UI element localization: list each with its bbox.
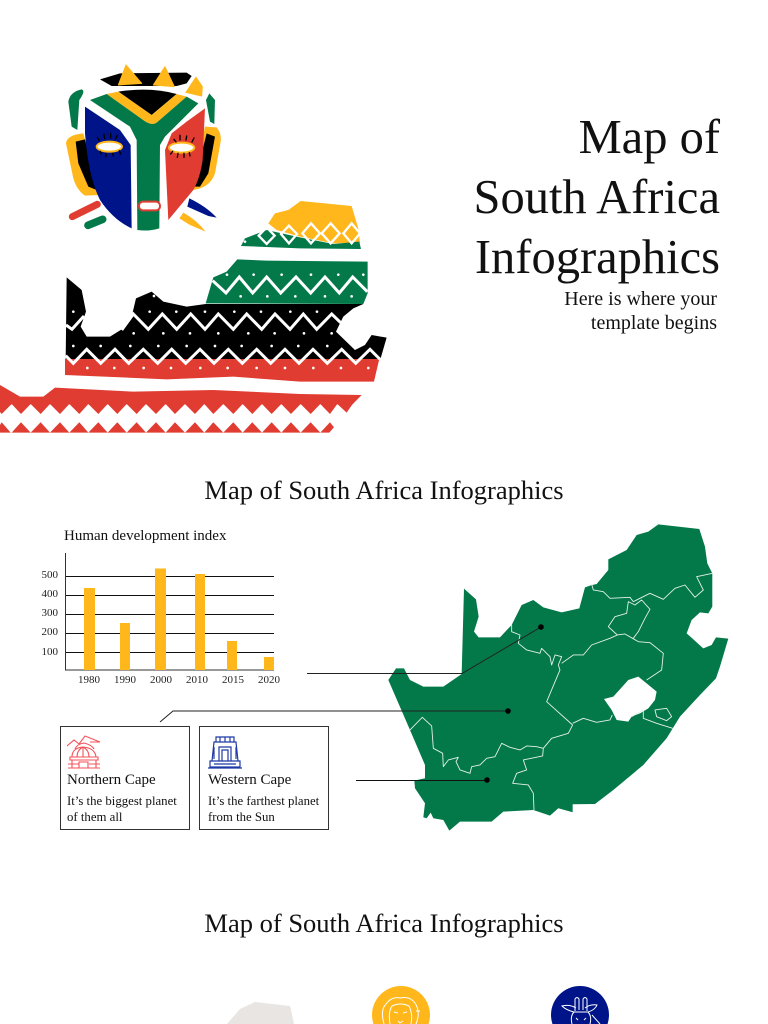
icon: giraffe badge: [551, 986, 609, 1024]
bar chart: human development index: 1990: [114, 674, 136, 686]
patterned map of South Africa: [0, 201, 387, 433]
map outline: [388, 524, 728, 831]
icon: tribal mask: [66, 65, 221, 232]
title: [473, 111, 720, 284]
card title: Northern Cape: [67, 772, 156, 788]
province borders: [410, 573, 712, 810]
bar chart: human development index: 500: [42, 569, 58, 581]
callout line: Northern Cape: [160, 708, 511, 722]
title: South Africa: [473, 171, 720, 224]
bar chart: human development index: 2015: [222, 674, 244, 686]
card text: of them all: [67, 810, 122, 824]
bar chart: human development index: 2000: [150, 674, 172, 686]
heading: second section: Map of South Africa Infographics: [204, 908, 564, 938]
subtitle: template begins: [591, 312, 717, 334]
heading: map section: Map of South Africa Infographics: [204, 475, 564, 505]
card title: Western Cape: [208, 772, 291, 788]
bar chart: human development index: 200: [42, 626, 58, 638]
bar chart: human development index: 400: [42, 588, 58, 600]
callout line: Western Cape: [356, 777, 490, 783]
panel: Northern Cape: [60, 726, 190, 830]
callout line: Northern region: [307, 624, 544, 674]
Lesotho: [604, 677, 657, 722]
gray map fragment: [227, 1002, 294, 1024]
card text: [208, 794, 320, 824]
card text: It’s the biggest planet: [67, 794, 177, 808]
subtitle: [564, 288, 717, 334]
bar chart: human development index: 2010: [186, 674, 208, 686]
chart title: Human development index: [64, 528, 226, 544]
panel: Western Cape: [199, 726, 329, 830]
title: Map of: [579, 111, 720, 164]
bar chart: human development index: [42, 553, 280, 686]
card text: [67, 794, 177, 824]
bar chart: human development index: 2020: [258, 674, 280, 686]
map of South Africa with provinces: [388, 524, 728, 831]
bar chart: human development index: 300: [42, 607, 58, 619]
title: Infographics: [475, 231, 720, 284]
icon: monument: [208, 736, 242, 769]
icon: lion badge: [372, 986, 430, 1024]
bar chart: human development index: 100: [42, 646, 58, 658]
card text: from the Sun: [208, 810, 275, 824]
card text: It’s the farthest planet: [208, 794, 319, 808]
icon: hut: [67, 735, 100, 768]
bar chart: human development index: 1980: [78, 674, 100, 686]
subtitle: Here is where your: [564, 288, 717, 310]
